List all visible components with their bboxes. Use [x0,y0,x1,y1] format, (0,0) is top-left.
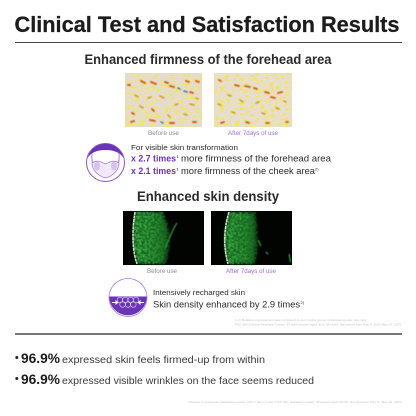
caption: after 7 days: After 7days of use [226,269,277,275]
icon: compressed skin cells [109,278,147,316]
text: skin transformation [131,143,331,176]
stat: firmed-up from within [15,351,265,366]
footnote: clinical test [235,318,402,326]
stat: cheek 2.1 times: 1 [176,166,180,172]
stat: wrinkles reduced [15,372,314,387]
photo: forehead before use [125,73,202,127]
stat: firmed-up from within: 96.9% [21,351,60,366]
stat: cheek 2.1 times: 2) [315,166,319,172]
panel: satisfaction results [15,351,402,404]
stat: wrinkles reduced: expressed visible wrinkles on the face seems reduced [62,376,314,387]
footnote: clinical test: P&K Skin Clinical Research Center, 33 adult women aged 30 to 59 years, test period from May 8, 2023-May 24, 2023. [235,322,402,326]
stat: cheek 2.1 times [131,166,319,176]
heading: skin density: Enhanced skin density [137,188,279,204]
photo: forehead after use [214,73,292,127]
stat: firmed-up from within: expressed skin feels firmed-up from within [62,355,265,366]
text: skin transformation: For visible skin transformation [131,143,238,152]
stat: forehead 2.7 times: 1 [176,154,180,159]
micrograph: after use [211,211,292,265]
text: density result [153,288,305,310]
stat: wrinkles reduced: 96.9% [21,372,60,387]
stat: forehead 2.7 times: x 2.7 times [131,154,176,164]
panel: forehead firmness [84,52,332,182]
caption: before use: Before use [147,269,178,275]
stat: cheek 2.1 times: more firmness of the cheek area [181,166,315,176]
stat: cheek 2.1 times: x 2.1 times [131,166,176,176]
footnote: clinical test: 1-2) Relative improvement rate compared to our control group, individual results may vary. [235,318,367,322]
stat: forehead 2.7 times: more firmness of the forehead area [181,154,331,164]
caption: before use: Before use [148,131,180,137]
caption: after 7 days: After 7days of use [228,131,279,137]
panel: skin density [109,188,402,326]
footnote: survey: *Results of consumer satisfaction survey after 7 days of use *P&K Skin Research Center, 33 women aged 30-59, test period on May 8 - May 24, 2023. [188,400,402,404]
text: density result: Intensively recharged skin [153,288,245,297]
icon: face with mask [86,144,124,182]
text: density result: 2) [300,300,305,305]
text: density result: Skin density enhanced by 2.9 times [153,300,300,310]
heading: forehead firmness: Enhanced firmness of the forehead area [84,52,332,67]
title: Clinical Test and Satisfaction Results [14,12,400,37]
micrograph: before use [123,211,204,265]
